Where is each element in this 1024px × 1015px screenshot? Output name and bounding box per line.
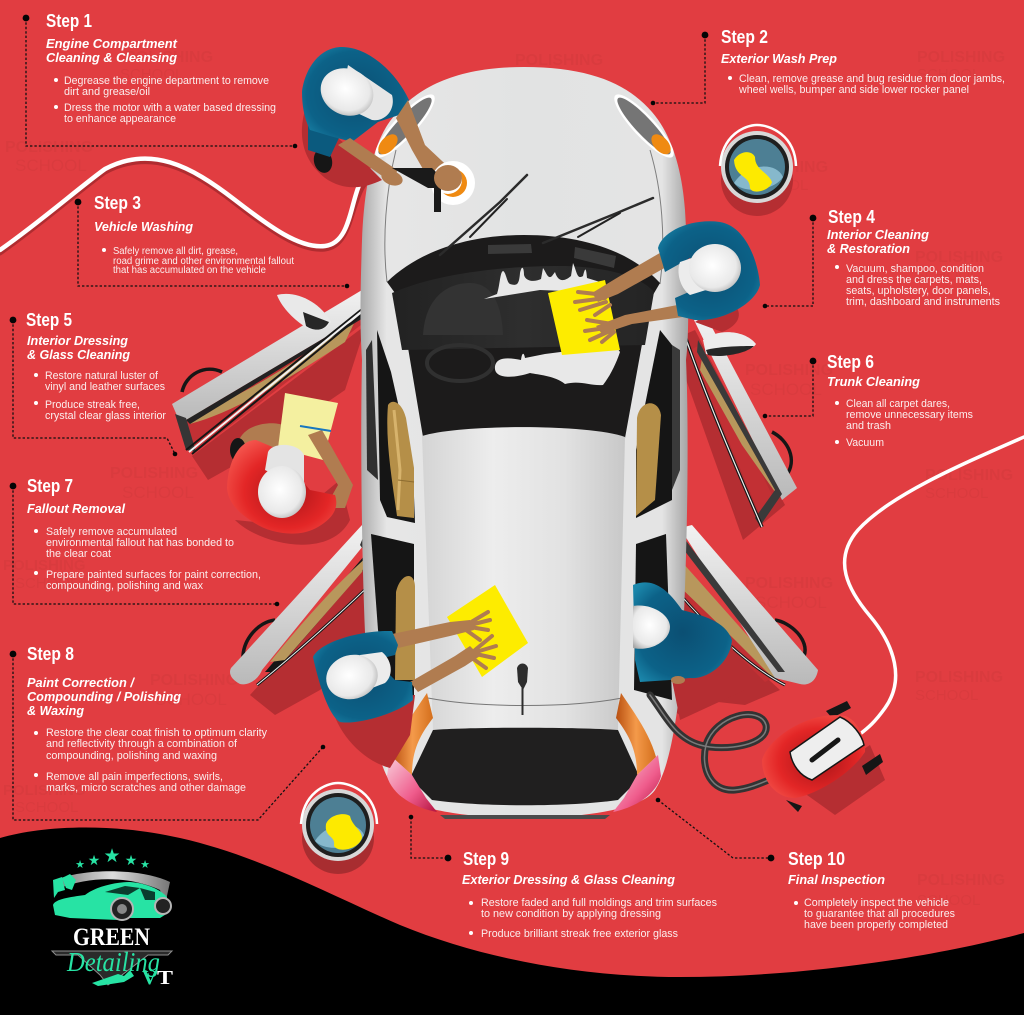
bullets: have been properly completed [804,919,948,931]
water [729,139,785,195]
GREEN wordmark: GREEN [73,924,150,951]
heading: Step 5 [26,309,72,330]
watermarks: SCHOOL [917,66,980,83]
shirt [633,582,732,682]
watermarks: POLISHING [3,557,86,574]
handle [812,740,838,760]
heading: Step 2 [721,26,768,47]
bullets: Safely remove accumulated [46,526,177,538]
subtitle: Final Inspection [788,872,885,887]
bullets: Dress the motor with a water based dressing [64,102,276,114]
VT: V [142,967,158,989]
subtitle: Exterior Wash Prep [721,51,837,66]
legs [308,120,345,157]
keyhole [517,664,528,715]
watermarks: SCHOOL [925,485,988,502]
stars: ★ [75,858,85,871]
arm lower [410,646,480,692]
cap [313,60,393,124]
watermarks: SCHOOL [15,156,87,175]
bullets [835,398,974,449]
bullets [728,73,1005,96]
subtitle: Compounding / Polishing [27,689,181,704]
watermarks: SCHOOL [155,690,227,709]
watermarks: SCHOOL [915,687,978,704]
shadow [330,695,415,768]
heading: Step 4 [828,206,876,227]
subtitle: & Glass Cleaning [27,347,130,362]
car body [360,67,688,819]
watermarks: POLISHING [110,465,198,482]
spray gun [53,874,76,898]
watermarks: POLISHING [5,139,93,156]
heading: Step 10 [788,848,845,869]
watermarks: SCHOOL [745,177,808,194]
shadow [302,802,374,874]
bullets [469,897,718,940]
person 4 wiping trunk [313,585,528,768]
bullets [34,370,166,422]
inner [725,135,789,199]
silver arch [55,871,170,905]
car shell [360,67,688,818]
cap [678,244,741,295]
watermarks: POLISHING [745,362,833,379]
dashboard [392,266,654,350]
clipboard [278,393,338,460]
panel [790,717,864,780]
cloth [447,585,528,677]
bullets: trim, dashboard and instruments [846,296,1001,308]
watermarks: SCHOOL [750,380,822,399]
polisher [392,168,452,212]
watermarks: SCHOOL [120,66,183,83]
watermarks: POLISHING [745,575,833,592]
watermarks: POLISHING [740,159,828,176]
bullets: seats, upholstery, door panels, [846,285,991,297]
bullets: and reflectivity through a combination of [46,738,238,750]
subtitle [827,227,929,256]
panel: step 10 [788,848,956,931]
dash pod [423,283,503,335]
rear bumper [440,815,610,819]
trunk seam [428,698,622,706]
bullets: Restore faded and full moldings and trim surfaces [481,897,718,909]
stars: ★ [140,858,150,871]
subtitle: Exterior Dressing & Glass Cleaning [462,872,675,887]
watermarks: SCHOOL [755,593,827,612]
subtitle: & Waxing [27,703,84,718]
Detailing script: Detailing [66,947,160,977]
watermarks: POLISHING [125,49,213,66]
watermarks: POLISHING [915,249,1003,266]
shirt [658,221,760,320]
cap [321,649,391,705]
shadow [721,144,793,216]
polisher mark [92,970,134,986]
bullets: compounding, polishing and wax [46,580,204,592]
bucket top right [720,125,796,216]
shadow [800,745,885,815]
bucket bottom left [301,783,377,874]
left arm [240,423,290,452]
person 2 wiping windshield [548,221,760,355]
subtitle [27,675,181,718]
cap [258,445,306,518]
wheels [786,701,883,812]
vent slots [488,244,616,268]
bullets: Completely inspect the vehicle [804,897,949,909]
watermarks: POLISHING [917,872,1005,889]
chevron [52,951,172,985]
wheels [111,898,171,920]
wipers [440,175,653,255]
car [53,882,168,920]
subtitle: Interior Cleaning [827,227,929,242]
door: rear left [230,525,388,685]
bullets: Restore the clear coat finish to optimum clarity [46,727,268,739]
arm right [396,100,458,190]
panel: step 3 [94,192,294,276]
bullets [102,246,294,276]
water [310,797,366,853]
handle [720,125,796,166]
bullets: remove unnecessary items [846,409,974,421]
shoe [311,147,335,175]
left side openings [366,330,415,700]
cloth [548,280,620,355]
callout lines [10,15,816,861]
subtitle: Trunk Cleaning [827,374,920,389]
bullets: road grime and other environmental fallout [113,256,294,267]
watermarks: SCHOOL [122,483,194,502]
bullets: marks, micro scratches and other damage [46,782,246,794]
bullets [34,727,268,794]
bullets: compounding, polishing and waxing [46,750,217,762]
roof and trunk [422,427,625,730]
bullets: Produce streak free, [45,399,140,411]
windows [105,886,155,900]
VT: T [157,967,174,989]
panel: step 8 [27,643,268,794]
black footer wave [0,827,1024,1015]
windshield [387,235,660,438]
mirror right [703,332,756,356]
heading: Step 1 [46,10,92,31]
heading: Step 6 [827,351,874,372]
subtitle: Engine Compartment [46,36,178,51]
white cord left [0,158,388,253]
watermarks: POLISHING [917,49,1005,66]
left headlight [368,88,442,164]
subtitle: Fallout Removal [27,501,125,516]
bullets: to enhance appearance [64,113,176,125]
heading: Step 8 [27,643,74,664]
polisher pad [431,161,475,205]
panel: step 1 [46,10,276,125]
stars: ★ [103,845,121,867]
heading: Step 3 [94,192,141,213]
right arm [308,430,353,508]
bullets: Safely remove all dirt, grease, [113,246,238,257]
white cord right [845,437,1024,734]
hands [379,165,462,191]
panel: step 9 [462,848,718,940]
hand upper [575,292,610,315]
panel: step 4 [827,206,1001,308]
bullets: that has accumulated on the vehicle [113,265,267,276]
vacuum cleaner [762,701,885,815]
sponge [734,152,772,192]
shadow [235,480,350,545]
bullets: Clean, remove grease and bug residue from door jambs, [739,73,1005,85]
stars: ★ [125,853,137,869]
subtitle [27,333,130,362]
shirt [313,631,413,723]
steering shape [427,345,493,381]
bullets: crystal clear glass interior [45,410,166,422]
watermarks: POLISHING [515,52,603,69]
panel: step 5 [26,309,166,422]
left tail light [387,693,437,812]
bullets: to new condition by applying dressing [481,908,661,920]
heading: Step 7 [27,475,73,496]
panel: step 6 [827,351,974,449]
bullets: and dress the carpets, mats, [846,274,982,286]
vacuum hose [650,695,790,790]
shadow [302,110,382,187]
foam top [484,263,600,299]
sponge [326,814,362,850]
bullets: Degrease the engine department to remove [64,75,269,87]
watermarks: SCHOOL [15,575,78,592]
cap [633,606,670,649]
bullets: wheel wells, bumper and side lower rocker panel [738,84,969,96]
subtitle: Vehicle Washing [94,219,193,234]
right headlight [607,88,681,164]
bullets: to guarantee that all procedures [804,908,956,920]
stars: ★ [88,853,100,869]
bullets: Restore natural luster of [45,370,159,382]
shoe [230,438,246,462]
bullets [835,263,1001,308]
watermarks: POLISHING [3,782,86,799]
bullets: Vacuum [846,437,884,449]
heading: Step 9 [463,848,509,869]
subtitle: Interior Dressing [27,333,128,348]
right side openings [634,330,680,700]
rim [302,789,374,861]
watermarks: SCHOOL [15,799,78,816]
rear window [410,728,640,805]
arm upper [392,620,474,648]
logo: Green Detailing VT [52,845,174,989]
bullets: Vacuum, shampoo, condition [846,263,984,275]
bullets: the clear coat [46,548,111,560]
hood seams [385,150,663,284]
watermarks: SCHOOL [917,892,980,909]
arm left [338,138,397,185]
panel: step 2 [721,26,1005,96]
door shadows [192,325,785,715]
shirt [302,47,409,142]
bullets: Produce brilliant streak free exterior glass [481,928,679,940]
bullets: dirt and grease/oil [64,86,150,98]
subtitle: & Restoration [827,241,910,256]
bullets: Remove all pain imperfections, swirls, [46,771,223,783]
rim [721,131,793,203]
shadow [695,300,739,332]
shadow [670,640,745,720]
pen [300,426,331,431]
person 1 polishing hood [302,47,475,212]
handle [301,783,377,824]
watermarks: SCHOOL [915,267,978,284]
mirror left [277,294,331,330]
hand upper [466,612,490,640]
bullets [794,897,956,931]
subtitle [46,36,178,65]
watermarks: POLISHING [925,467,1013,484]
bullets: Prepare painted surfaces for paint correction, [46,569,261,581]
person 3 with clipboard [227,393,353,545]
panel: step 7 [27,475,261,592]
foam bottom [495,345,620,385]
arm upper [592,250,668,302]
bullets: Clean all carpet dares, [846,398,950,410]
bullets: environmental fallout hat has bonded to [46,537,234,549]
body [762,715,865,798]
bullets [34,526,261,592]
arm lower [596,303,690,334]
door: rear right [660,525,818,685]
hand lower [472,636,496,668]
bullets: vinyl and leather surfaces [45,381,166,393]
door: front right [684,316,797,527]
watermarks: POLISHING [915,669,1003,686]
hand lower [585,320,614,342]
watermarks: POLISHING [150,672,238,689]
inner [306,793,370,857]
door: front left [172,290,372,454]
subtitle: Paint Correction / [27,675,135,690]
right tail light [613,693,661,812]
bullets: and trash [846,420,891,432]
shirt [227,440,336,534]
VT [142,967,174,989]
stars [75,845,150,871]
person 5 in rear door [633,582,745,720]
wrist [671,676,685,684]
subtitle: Cleaning & Cleansing [46,50,177,65]
bullets [54,75,276,125]
